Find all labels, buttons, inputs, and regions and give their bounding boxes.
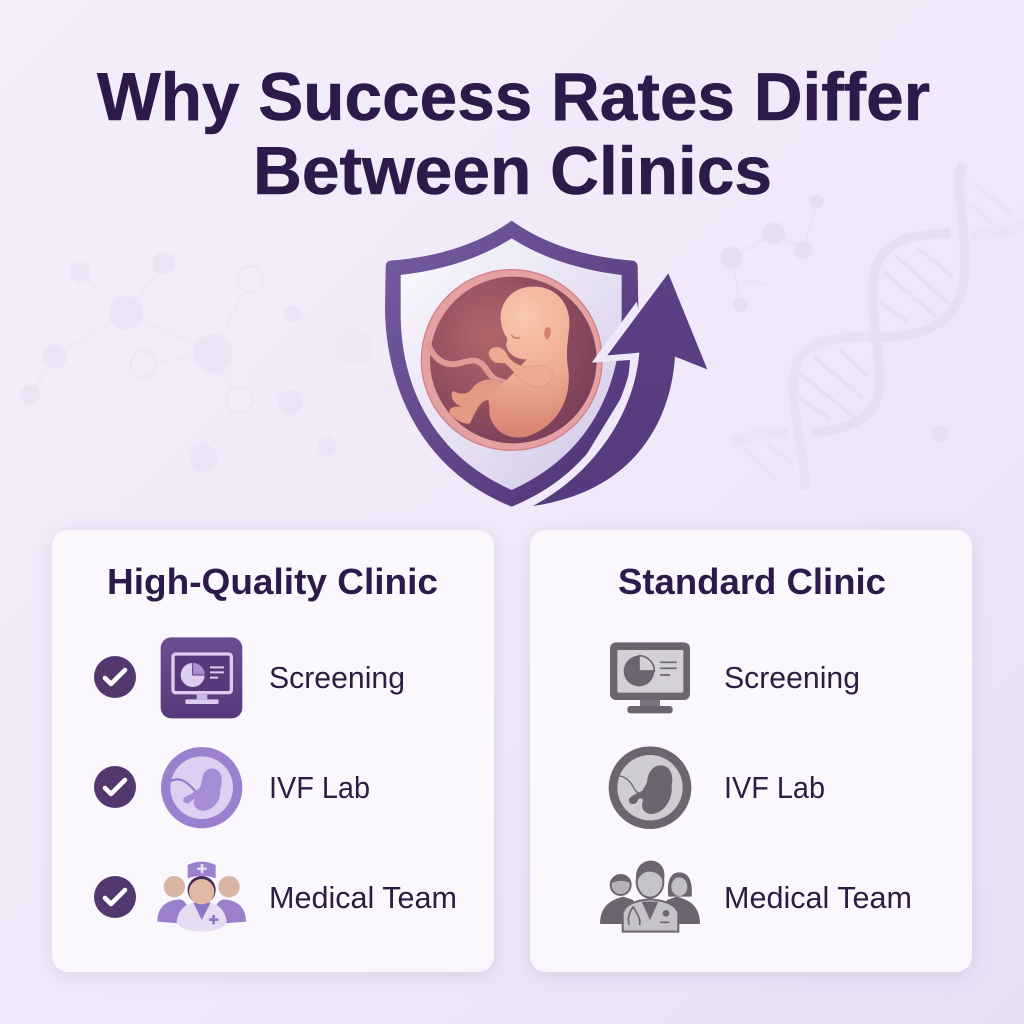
- row labels: [269, 660, 457, 915]
- umbilical cord: [427, 342, 507, 383]
- icon: medical team: [157, 862, 246, 932]
- row labels: Screening: [269, 660, 405, 695]
- panel: high-quality clinic: [52, 530, 494, 972]
- heading: Standard Clinic: [618, 561, 886, 602]
- row labels: IVF Lab: [724, 770, 825, 805]
- central illustration: shield, fetus, arrow: [385, 221, 707, 507]
- shield: [385, 221, 638, 507]
- molecule network background: [20, 252, 373, 473]
- row labels: IVF Lab: [269, 770, 370, 805]
- womb circle: [421, 270, 602, 450]
- icon: medical team grey: [600, 861, 700, 932]
- upward arrow: [527, 273, 707, 507]
- check marks: [94, 656, 136, 918]
- icon: screening monitor: [161, 637, 242, 718]
- panel: standard clinic: [530, 530, 972, 972]
- DNA helix background: [733, 163, 1024, 490]
- heading: High-Quality Clinic: [107, 561, 438, 602]
- row labels: Medical Team: [724, 880, 912, 915]
- small molecule background right: [720, 194, 948, 442]
- icon: screening monitor grey: [610, 642, 690, 713]
- title: Between Clinics: [253, 133, 772, 209]
- row labels: Medical Team: [269, 880, 457, 915]
- title: Why Success Rates Differ: [97, 59, 930, 135]
- row labels: Screening: [724, 660, 860, 695]
- icon: ivf lab embryo grey: [609, 746, 691, 829]
- icon: ivf lab embryo: [161, 747, 242, 828]
- title: [97, 59, 930, 209]
- row labels: [724, 660, 912, 915]
- fetus: [449, 287, 569, 437]
